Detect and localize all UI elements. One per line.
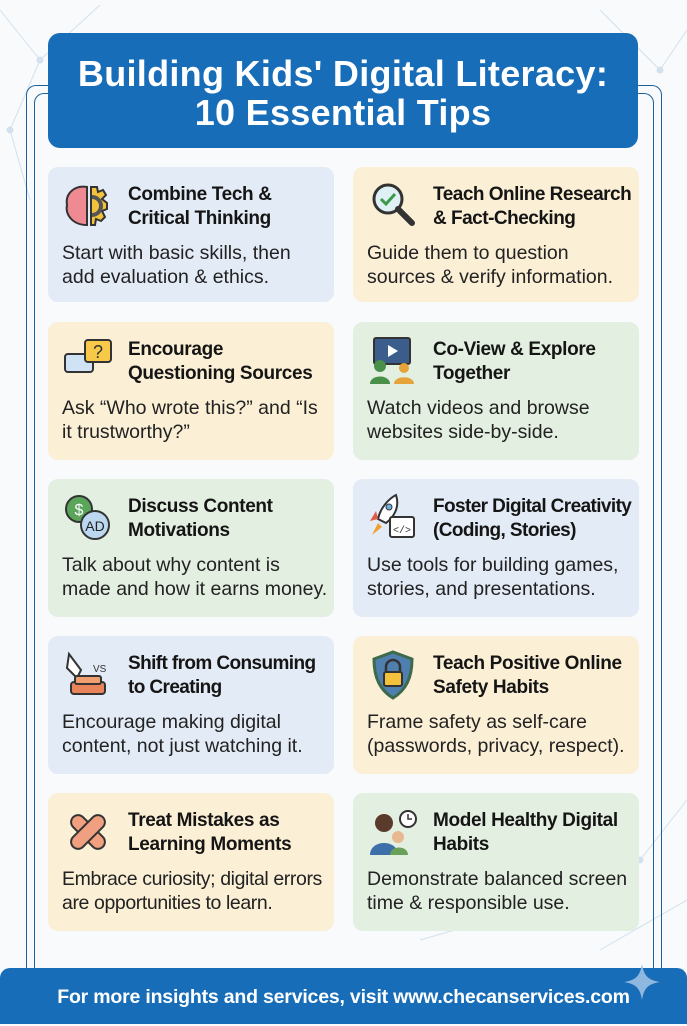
icon: speech bubbles — [64, 339, 112, 373]
outer frame — [26, 85, 662, 970]
card: safety — [353, 636, 639, 774]
card: research: & Fact-Checking — [433, 208, 575, 229]
footer: For more insights and services, visit www.checanservices.com — [57, 986, 630, 1008]
card: combine tech: Critical Thinking — [128, 208, 271, 229]
title: Building Kids' Digital Literacy: — [78, 53, 608, 94]
icon: hand vs couch — [66, 652, 107, 695]
icon: hand vs couch: VS — [93, 664, 107, 675]
card: motivations: Discuss Content — [128, 496, 273, 517]
card: model habits: Habits — [433, 834, 489, 855]
card: creativity: Foster Digital Creativity — [433, 496, 631, 517]
card: motivations — [48, 479, 334, 617]
card: mistakes: Treat Mistakes as — [128, 810, 279, 831]
icon: bandage — [70, 814, 106, 850]
title — [48, 33, 638, 148]
card: questioning — [48, 322, 334, 460]
card: combine tech — [48, 167, 334, 302]
card: safety: Teach Positive Online — [433, 653, 622, 674]
icon: dollar ad — [65, 495, 110, 540]
card: co-view: Together — [433, 363, 510, 384]
card: creativity: stories, and presentations. — [367, 578, 596, 600]
card: creativity — [353, 479, 639, 617]
icon: shield lock — [372, 650, 414, 700]
card: co-view: Watch videos and browse — [367, 397, 590, 419]
card: creating: content, not just watching it. — [62, 735, 303, 757]
card: questioning: Encourage — [128, 339, 223, 360]
card: creativity: (Coding, Stories) — [433, 520, 576, 541]
card: motivations: Talk about why content is — [62, 554, 280, 576]
card: mistakes: Learning Moments — [128, 834, 291, 855]
icon: sparkle — [624, 964, 660, 1000]
icon: dollar ad: AD — [85, 518, 105, 534]
card: research — [353, 167, 639, 302]
card: research: sources & verify information. — [367, 266, 613, 288]
card: co-view — [353, 322, 639, 460]
card: combine tech: Start with basic skills, then — [62, 242, 291, 264]
icon: rocket code: </> — [393, 525, 411, 537]
card: safety: Frame safety as self-care — [367, 711, 587, 733]
card: creating: Shift from Consuming — [128, 653, 315, 674]
card: model habits: Demonstrate balanced screen — [367, 868, 627, 890]
card: research: Guide them to question — [367, 242, 569, 264]
card: model habits: Model Healthy Digital — [433, 810, 618, 831]
card: mistakes: are opportunities to learn. — [62, 892, 272, 914]
card: mistakes: Embrace curiosity; digital errors — [62, 868, 322, 890]
card: research: Teach Online Research — [433, 184, 631, 205]
card: questioning: it trustworthy?” — [62, 421, 190, 443]
icon: magnifier — [372, 184, 415, 226]
icon: dollar ad: $ — [75, 502, 84, 519]
card: questioning: Questioning Sources — [128, 363, 312, 384]
icon: brain gear — [66, 186, 108, 226]
icon: speech bubbles: ? — [93, 342, 103, 362]
card: co-view: websites side-by-side. — [367, 421, 559, 443]
card: creating — [48, 636, 334, 774]
card: combine tech: add evaluation & ethics. — [62, 266, 269, 288]
title: 10 Essential Tips — [195, 92, 491, 133]
card: questioning: Ask “Who wrote this?” and “Is — [62, 397, 318, 419]
card: co-view: Co-View & Explore — [433, 339, 596, 360]
card: combine tech: Combine Tech & — [128, 184, 272, 205]
card: safety: Safety Habits — [433, 677, 549, 698]
card: model habits — [353, 793, 639, 931]
card: motivations: made and how it earns money. — [62, 578, 327, 600]
icon: parent child clock — [370, 810, 417, 855]
card: creating: to Creating — [128, 677, 222, 698]
footer — [0, 968, 687, 1024]
card: mistakes — [48, 793, 334, 931]
icon: screen with people — [370, 337, 414, 384]
card: creativity: Use tools for building games, — [367, 554, 618, 576]
icon: rocket code — [370, 494, 415, 538]
card: motivations: Motivations — [128, 520, 230, 541]
card: safety: (passwords, privacy, respect). — [367, 735, 625, 757]
card: creating: Encourage making digital — [62, 711, 281, 733]
card: model habits: time & responsible use. — [367, 892, 570, 914]
